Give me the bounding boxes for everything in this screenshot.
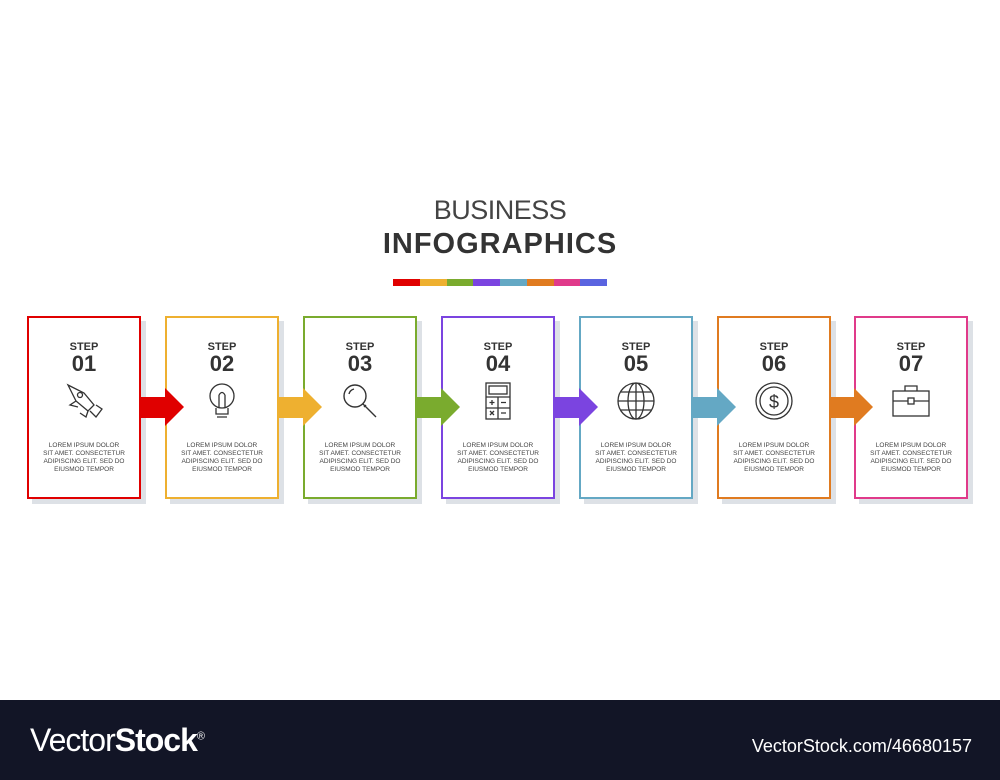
step 5: EIUSMOD TEMPOR bbox=[606, 466, 666, 473]
step 5: LOREM IPSUM DOLOR bbox=[601, 442, 671, 449]
url: VectorStock.com/46680157 bbox=[752, 736, 972, 756]
step 2: LOREM IPSUM DOLOR bbox=[187, 442, 257, 449]
step 2 bbox=[165, 316, 279, 499]
step 4: SIT AMET. CONSECTETUR bbox=[457, 450, 539, 457]
step 2: SIT AMET. CONSECTETUR bbox=[181, 450, 263, 457]
step 7: 07 bbox=[899, 351, 923, 376]
step 7: SIT AMET. CONSECTETUR bbox=[870, 450, 952, 457]
step 7: LOREM IPSUM DOLOR bbox=[876, 442, 946, 449]
step 6: ADIPISCING ELIT. SED DO bbox=[734, 458, 814, 465]
step 6: STEP bbox=[760, 341, 788, 353]
step 5: STEP bbox=[622, 341, 650, 353]
step 1: EIUSMOD TEMPOR bbox=[54, 466, 114, 473]
step 7: EIUSMOD TEMPOR bbox=[881, 466, 941, 473]
step 6: LOREM IPSUM DOLOR bbox=[739, 442, 809, 449]
step 2: ADIPISCING ELIT. SED DO bbox=[182, 458, 262, 465]
title: INFOGRAPHICS bbox=[383, 228, 617, 260]
footer banner bbox=[0, 700, 1000, 780]
logo: VectorStock® bbox=[30, 722, 204, 758]
step 6 bbox=[717, 316, 831, 499]
step 4: EIUSMOD TEMPOR bbox=[468, 466, 528, 473]
step 2: 02 bbox=[210, 351, 234, 376]
title: BUSINESS bbox=[434, 195, 566, 225]
step 1 bbox=[27, 316, 141, 499]
step 7: ADIPISCING ELIT. SED DO bbox=[871, 458, 951, 465]
step 3: LOREM IPSUM DOLOR bbox=[325, 442, 395, 449]
step 4: LOREM IPSUM DOLOR bbox=[463, 442, 533, 449]
step 1: STEP bbox=[70, 341, 98, 353]
color bar bbox=[393, 279, 607, 286]
title bbox=[383, 195, 617, 260]
step 3: STEP bbox=[346, 341, 374, 353]
step 6: SIT AMET. CONSECTETUR bbox=[733, 450, 815, 457]
step 3: EIUSMOD TEMPOR bbox=[330, 466, 390, 473]
step 7 bbox=[854, 316, 968, 499]
step 6: EIUSMOD TEMPOR bbox=[744, 466, 804, 473]
step 3 bbox=[303, 316, 417, 499]
step 3: SIT AMET. CONSECTETUR bbox=[319, 450, 401, 457]
step 5: 05 bbox=[624, 351, 648, 376]
step 1: ADIPISCING ELIT. SED DO bbox=[44, 458, 124, 465]
step 2: EIUSMOD TEMPOR bbox=[192, 466, 252, 473]
step 7: STEP bbox=[897, 341, 925, 353]
step 3: ADIPISCING ELIT. SED DO bbox=[320, 458, 400, 465]
step 4 bbox=[441, 316, 555, 499]
step 4: 04 bbox=[486, 351, 510, 376]
step 2: STEP bbox=[208, 341, 236, 353]
step 1: 01 bbox=[72, 351, 96, 376]
step 5: SIT AMET. CONSECTETUR bbox=[595, 450, 677, 457]
step 1: SIT AMET. CONSECTETUR bbox=[43, 450, 125, 457]
step 6: 06 bbox=[762, 351, 786, 376]
step 1: LOREM IPSUM DOLOR bbox=[49, 442, 119, 449]
step 3: 03 bbox=[348, 351, 372, 376]
step 5: ADIPISCING ELIT. SED DO bbox=[596, 458, 676, 465]
step 5 bbox=[579, 316, 693, 499]
step 4: STEP bbox=[484, 341, 512, 353]
step 6: $ bbox=[769, 392, 779, 412]
step 4: ADIPISCING ELIT. SED DO bbox=[458, 458, 538, 465]
